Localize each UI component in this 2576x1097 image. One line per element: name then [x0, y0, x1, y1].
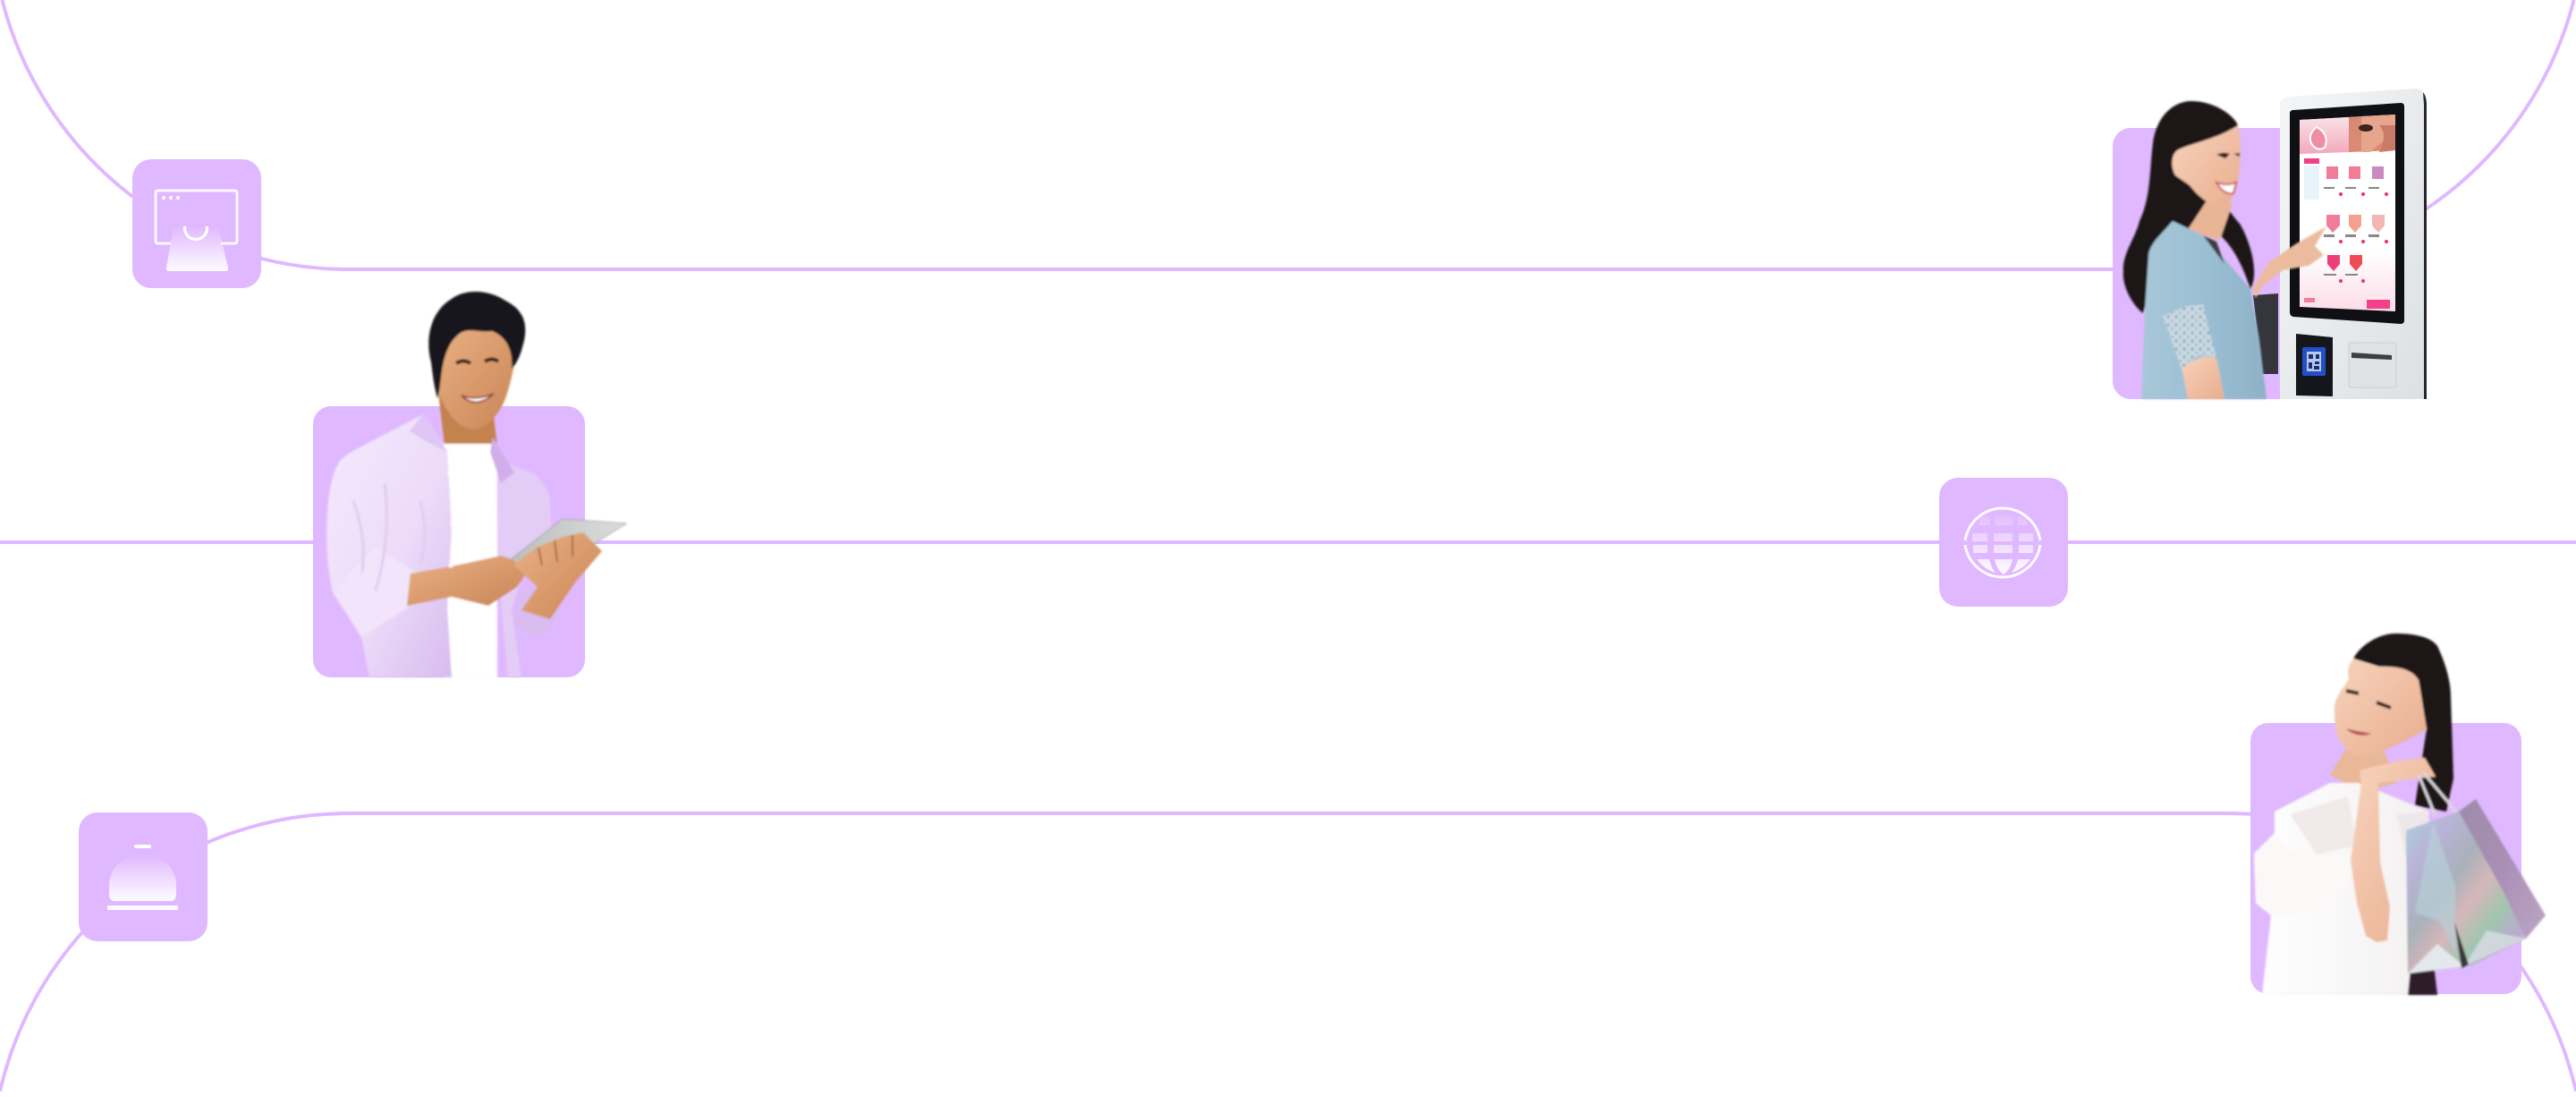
- panel: woman with shopping bags: [2250, 634, 2546, 995]
- QR scanner: [2296, 334, 2333, 396]
- person: woman: [2254, 634, 2546, 995]
- background card: [313, 406, 585, 677]
- panel: woman at self-service kiosk: [2113, 89, 2427, 399]
- background card: [2113, 128, 2384, 399]
- receipt printer: [2349, 343, 2396, 387]
- bottom connector line: [0, 813, 2576, 1092]
- kiosk screen: [2290, 103, 2404, 324]
- icon: service bell: [79, 812, 208, 941]
- kiosk: [2280, 89, 2427, 399]
- background card: [2250, 723, 2521, 994]
- panel: man with tablet: [313, 292, 626, 678]
- top connector line: [2, 0, 2574, 269]
- payment terminal: [2253, 293, 2278, 374]
- person: woman touching screen: [2123, 101, 2326, 399]
- middle connector line: [0, 540, 2576, 544]
- person: man: [326, 292, 626, 678]
- icon: online store: [132, 159, 261, 288]
- icon: globe: [1939, 478, 2068, 607]
